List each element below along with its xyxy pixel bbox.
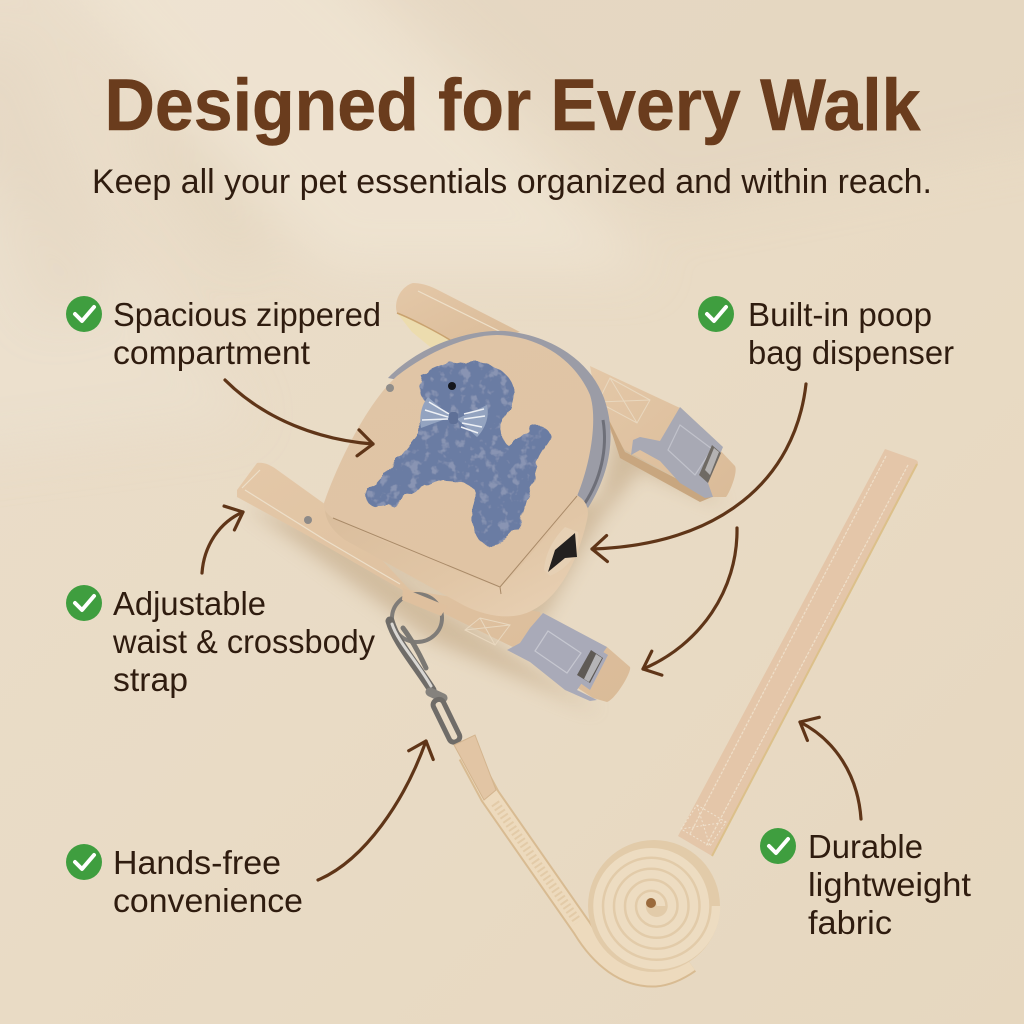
callout: adjustable strap: Adjustable bbox=[113, 585, 266, 622]
arrow: dispenser bbox=[592, 384, 806, 549]
bag front panel bbox=[324, 335, 593, 587]
callout: hands-free: Hands-free bbox=[113, 844, 281, 881]
callout: adjustable strap: strap bbox=[113, 661, 188, 698]
dog eye bbox=[448, 382, 456, 390]
callout: spacious compartment: compartment bbox=[113, 334, 310, 371]
callout: adjustable strap: waist & crossbody bbox=[112, 623, 375, 660]
callout: hands-free bbox=[66, 844, 303, 919]
icon: striped bow tie bbox=[420, 397, 488, 437]
callout: spacious compartment bbox=[66, 296, 381, 371]
callout: durable fabric: fabric bbox=[808, 904, 892, 941]
metal ring bbox=[392, 594, 442, 642]
product: bag harness with straps bbox=[237, 283, 918, 977]
icon: check bbox=[66, 296, 102, 332]
callout: durable fabric bbox=[760, 828, 971, 941]
bag gusset and zipper bbox=[388, 331, 611, 508]
leash loop handle bbox=[678, 449, 918, 856]
ring tab bbox=[402, 588, 447, 616]
upper strap bbox=[396, 283, 736, 502]
icon: check bbox=[760, 828, 796, 864]
leash bbox=[454, 735, 690, 977]
dog patch bbox=[366, 360, 550, 545]
arrow: compartment bbox=[225, 380, 373, 444]
callout: poop bag dispenser: bag dispenser bbox=[748, 334, 954, 371]
bag dispenser opening bbox=[544, 527, 578, 576]
callout: hands-free: convenience bbox=[113, 882, 303, 919]
callout: durable fabric: Durable bbox=[808, 828, 923, 865]
soft shadows bbox=[245, 410, 725, 712]
arrow: waist strap bbox=[202, 512, 243, 573]
callout: durable fabric: lightweight bbox=[808, 866, 971, 903]
icon: check bbox=[66, 585, 102, 621]
bag lower panel bbox=[325, 480, 588, 616]
leash coil bbox=[588, 840, 720, 972]
icon: check bbox=[66, 844, 102, 880]
callout: adjustable strap bbox=[66, 585, 375, 698]
title: Designed for Every Walk bbox=[104, 65, 921, 146]
callout: spacious compartment: Spacious zippered bbox=[113, 296, 381, 333]
rivet bbox=[386, 384, 394, 392]
callout: poop bag dispenser bbox=[698, 296, 954, 371]
lower buckle bbox=[507, 613, 608, 701]
bag seam bbox=[333, 496, 577, 594]
arrow: hands-free bbox=[318, 741, 426, 880]
arrow: dispenser strap bbox=[643, 528, 737, 669]
metal clip bbox=[390, 621, 461, 744]
callout: poop bag dispenser: Built-in poop bbox=[748, 296, 932, 333]
arrow: durable bbox=[800, 722, 861, 819]
lower strap bbox=[237, 463, 630, 702]
subtitle: Keep all your pet essentials organized and within reach. bbox=[92, 163, 932, 201]
icon: check bbox=[698, 296, 734, 332]
upper buckle bbox=[631, 407, 723, 498]
zipper line bbox=[585, 420, 604, 503]
